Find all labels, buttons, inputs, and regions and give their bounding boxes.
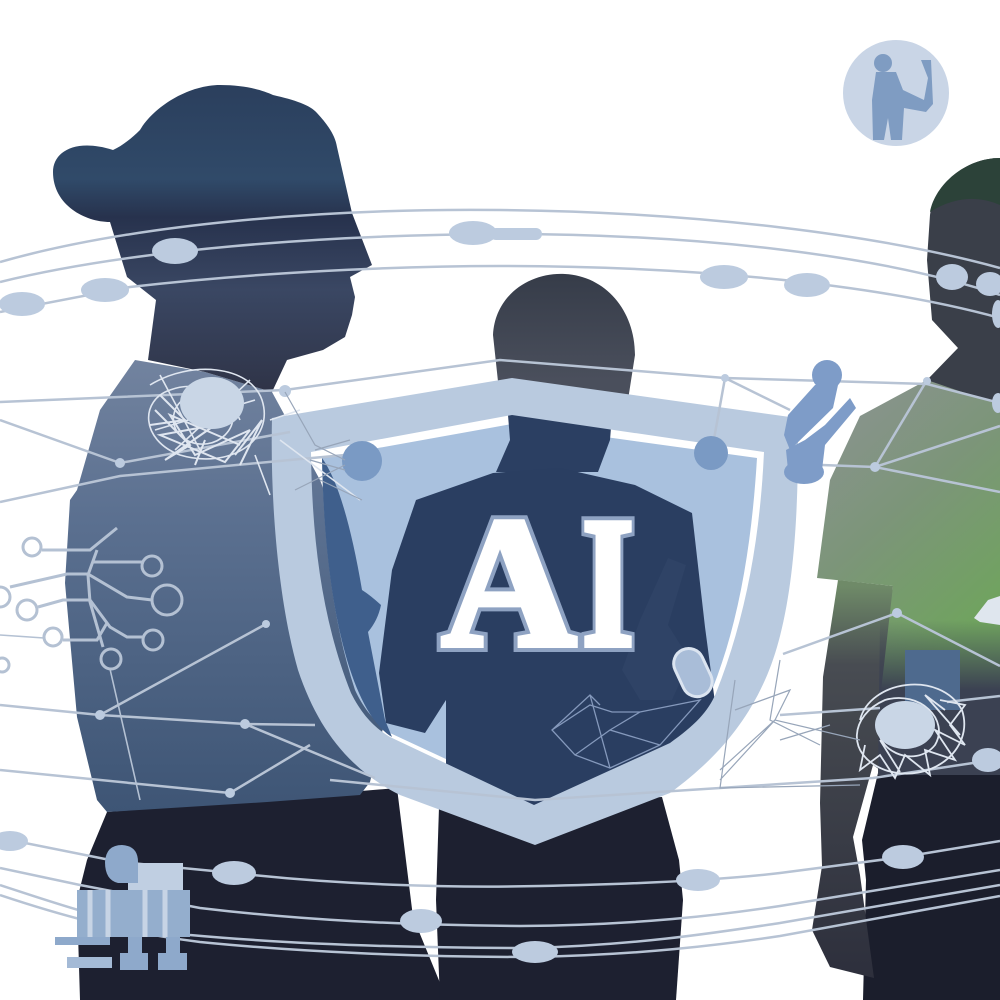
- shield: [272, 378, 798, 845]
- network nodes: [0, 221, 1000, 963]
- thin wires right of shield: [720, 660, 860, 788]
- person: centre: [436, 274, 683, 1000]
- shirt lower shadow: right person: [878, 620, 1000, 775]
- head: right person: [927, 158, 1000, 405]
- icon: circuit tree: [0, 528, 182, 800]
- middle upper lines: [0, 360, 1000, 403]
- constellation: [552, 695, 700, 768]
- arm: right person: [812, 580, 893, 978]
- person: left: [53, 85, 447, 1000]
- shield band: [272, 378, 798, 845]
- icon: right edge glyph: [974, 596, 1000, 625]
- shield interior: [322, 424, 757, 800]
- arm through shield: left person: [322, 458, 392, 737]
- hand: centre person: [622, 558, 690, 700]
- pocket: right person: [905, 650, 960, 710]
- AI lettering: A: [442, 480, 576, 686]
- neck through shield: centre person: [496, 415, 612, 472]
- AI lettering: [442, 480, 634, 686]
- shirt: right person: [817, 380, 1000, 775]
- icon: wire mesh left: [149, 369, 360, 500]
- lower orbit lines: [0, 624, 375, 778]
- shirt: centre person: [379, 468, 716, 806]
- bottom orbit lines: [0, 838, 1000, 887]
- capsule: [669, 644, 717, 702]
- shirt: left person: [65, 360, 385, 812]
- head: centre person: [493, 274, 635, 400]
- icon: wire mesh right: [857, 685, 965, 778]
- icon: machinery bottom-left: [55, 845, 190, 970]
- AI lettering: A: [442, 480, 576, 686]
- pants: right person: [862, 773, 1000, 1000]
- head and neck: left person: [53, 85, 372, 392]
- icon: robot arm: [784, 360, 856, 484]
- AI lettering: I: [582, 481, 634, 686]
- person: right: [812, 158, 1000, 1000]
- AI lettering: I: [582, 481, 634, 686]
- icon: figure badge: [843, 40, 949, 146]
- thin wires left of shield: [285, 392, 362, 500]
- pants: centre person: [436, 797, 683, 1000]
- pants: left person: [77, 788, 447, 1000]
- network lines: [0, 210, 1000, 957]
- top orbit lines: [0, 210, 1000, 268]
- hair: right person: [930, 158, 1000, 212]
